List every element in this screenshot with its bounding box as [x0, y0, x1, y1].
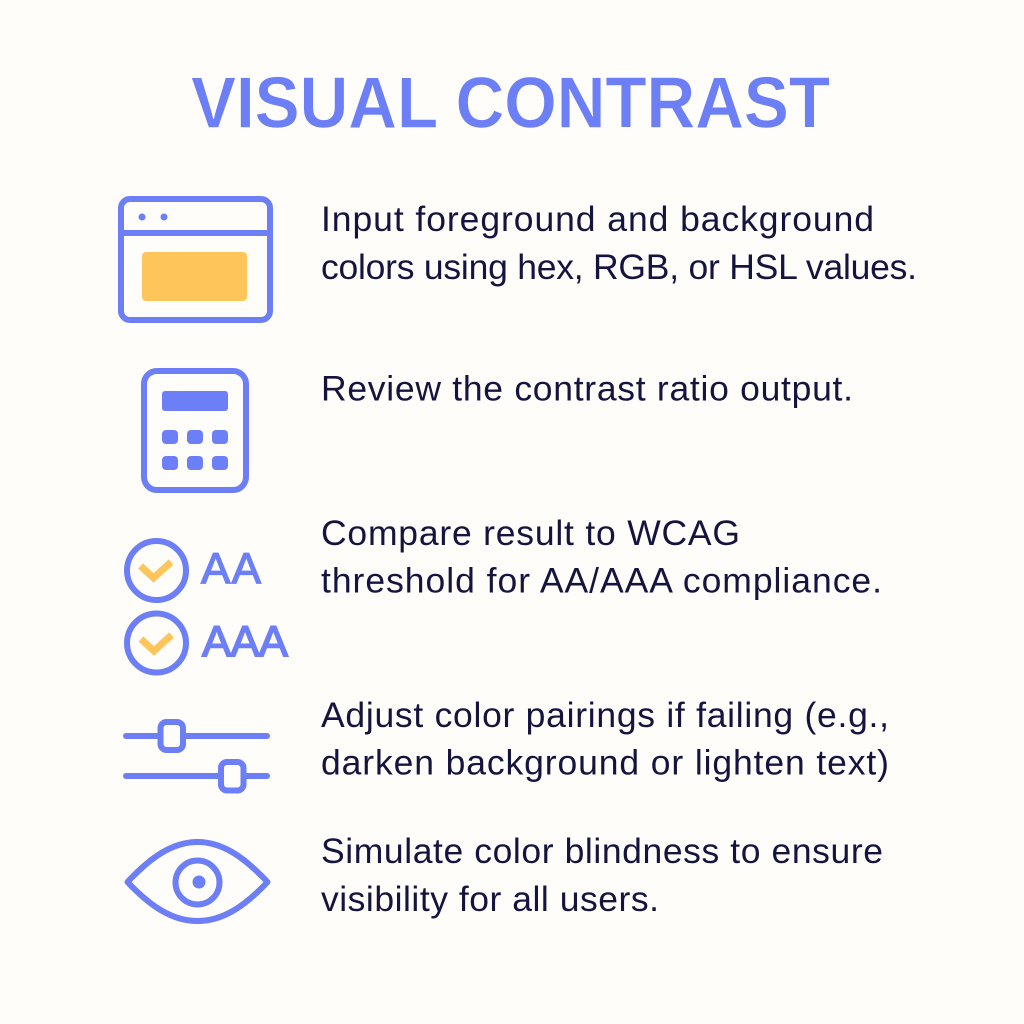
step 3 text: Compare result to WCAG — [321, 513, 740, 553]
step 2 text: Review the contrast ratio output. — [321, 368, 853, 408]
step 3 text — [321, 513, 882, 600]
step 1 text: colors using hex, RGB, or HSL values. — [321, 247, 917, 287]
step 5 text: visibility for all users. — [321, 879, 659, 919]
step 1 text: Input foreground and background — [321, 199, 874, 239]
step 5 text — [321, 831, 883, 919]
step 3 text: threshold for AA/AAA compliance. — [321, 560, 882, 600]
icon: browser window — [121, 199, 270, 320]
step 5 text: Simulate color blindness to ensure — [321, 831, 883, 871]
step 4 text: darken background or lighten text) — [321, 742, 889, 782]
icon: AAA check badge — [127, 614, 289, 672]
step 4 text — [321, 695, 889, 782]
step 1 text — [321, 199, 917, 287]
icon: AA check badge: AA — [201, 544, 262, 594]
step 4 text: Adjust color pairings if failing (e.g., — [321, 695, 889, 735]
icon: AA check badge — [127, 541, 262, 600]
icon: AAA check badge: AAA — [202, 618, 289, 666]
icon: eye — [128, 842, 268, 921]
icon: calculator — [144, 371, 246, 490]
icon: sliders — [126, 722, 267, 790]
title: VISUAL CONTRAST — [191, 64, 830, 144]
